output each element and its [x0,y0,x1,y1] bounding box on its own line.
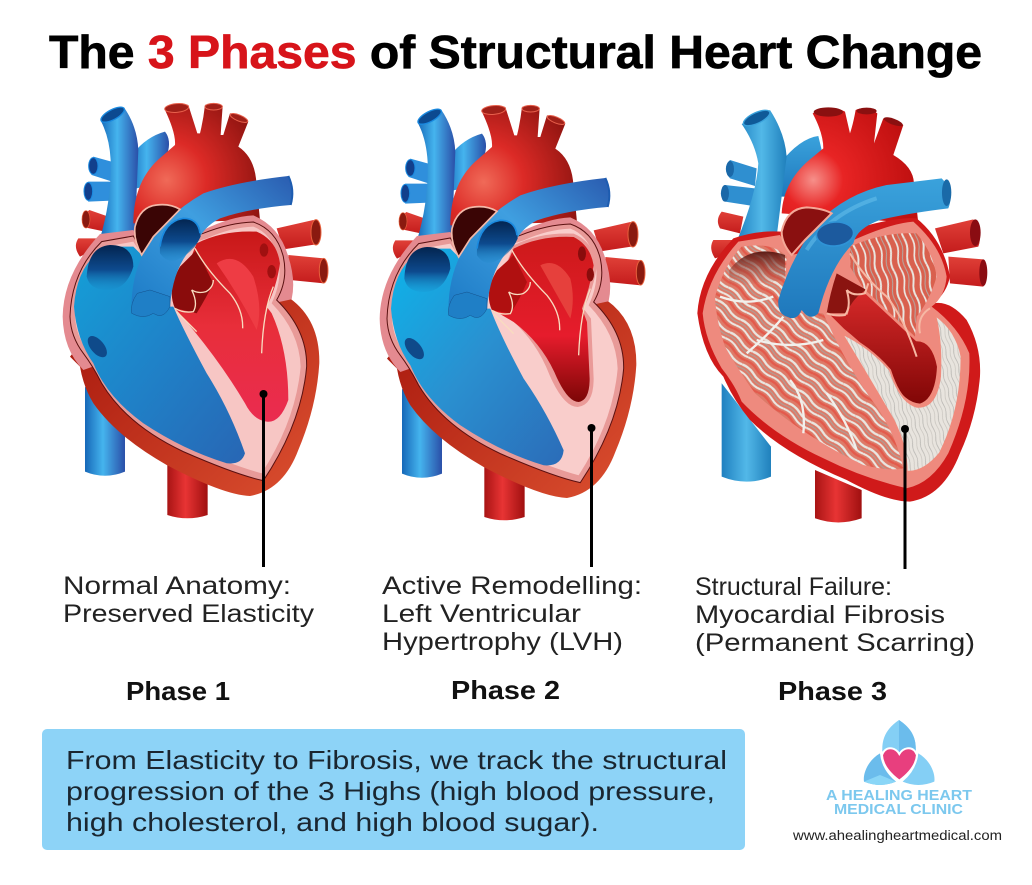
logo: A Healing Heart Medical Clinic: MEDICAL CLINIC [834,801,963,818]
callout: summary box: progression of the 3 Highs (high blood pressure, [66,776,715,806]
heading: phase 3: Phase 3 [778,676,887,706]
callout: summary box: From Elasticity to Fibrosis, we track the structural [66,745,727,775]
caption: phase 3: (Permanent Scarring) [695,629,975,657]
red chamber [827,290,938,405]
caption: phase 1: Preserved Elasticity [63,600,315,628]
left ventricle [175,231,288,422]
outer wall [697,218,980,502]
caption: phase 2: Left Ventricular [382,600,581,628]
heading: phase 2: Phase 2 [451,675,560,705]
caption: phase 3: Myocardial Fibrosis [695,601,945,629]
caption: phase 2: Hypertrophy (LVH) [382,628,623,656]
thickened myocardium [392,229,618,475]
icon: petals and heart [864,720,935,785]
heart illustration: phase 3 structural failure [697,107,987,522]
fibrotic left atrium [850,233,937,357]
callout: summary box: high cholesterol, and high blood sugar). [66,807,599,837]
logo: A Healing Heart Medical Clinic: A HEALING HEART [826,787,972,804]
callout: summary box [42,729,745,850]
heart illustration: phase 2 active remodelling [380,105,645,520]
heading: phase 1: Phase 1 [126,676,230,706]
caption: phase 1 [63,572,315,628]
inner pink wall [703,222,970,488]
leader line: phase 3 [901,425,909,569]
right ventricle [74,247,245,464]
right ventricle [391,249,564,465]
logo: A Healing Heart Medical Clinic [792,720,1002,843]
caption: phase 2 [382,572,642,656]
caption: phase 3 [695,573,975,657]
scarred septum and wall [842,315,962,472]
caption: phase 1: Normal Anatomy: [63,572,291,600]
heart illustration: phase 1 normal anatomy [63,103,328,518]
website: www.ahealingheartmedical.com [792,828,1002,843]
narrowed left ventricle [492,233,597,407]
leader line: phase 1 [260,390,268,567]
leader line: phase 2 [588,424,596,567]
caption: phase 2: Active Remodelling: [382,572,642,600]
title: The 3 Phases of Structural Heart Change [49,26,982,78]
fibrotic right ventricle [715,245,903,469]
caption: phase 3: Structural Failure: [695,573,892,601]
myocardium [75,227,301,473]
pulmonary artery [778,178,951,318]
